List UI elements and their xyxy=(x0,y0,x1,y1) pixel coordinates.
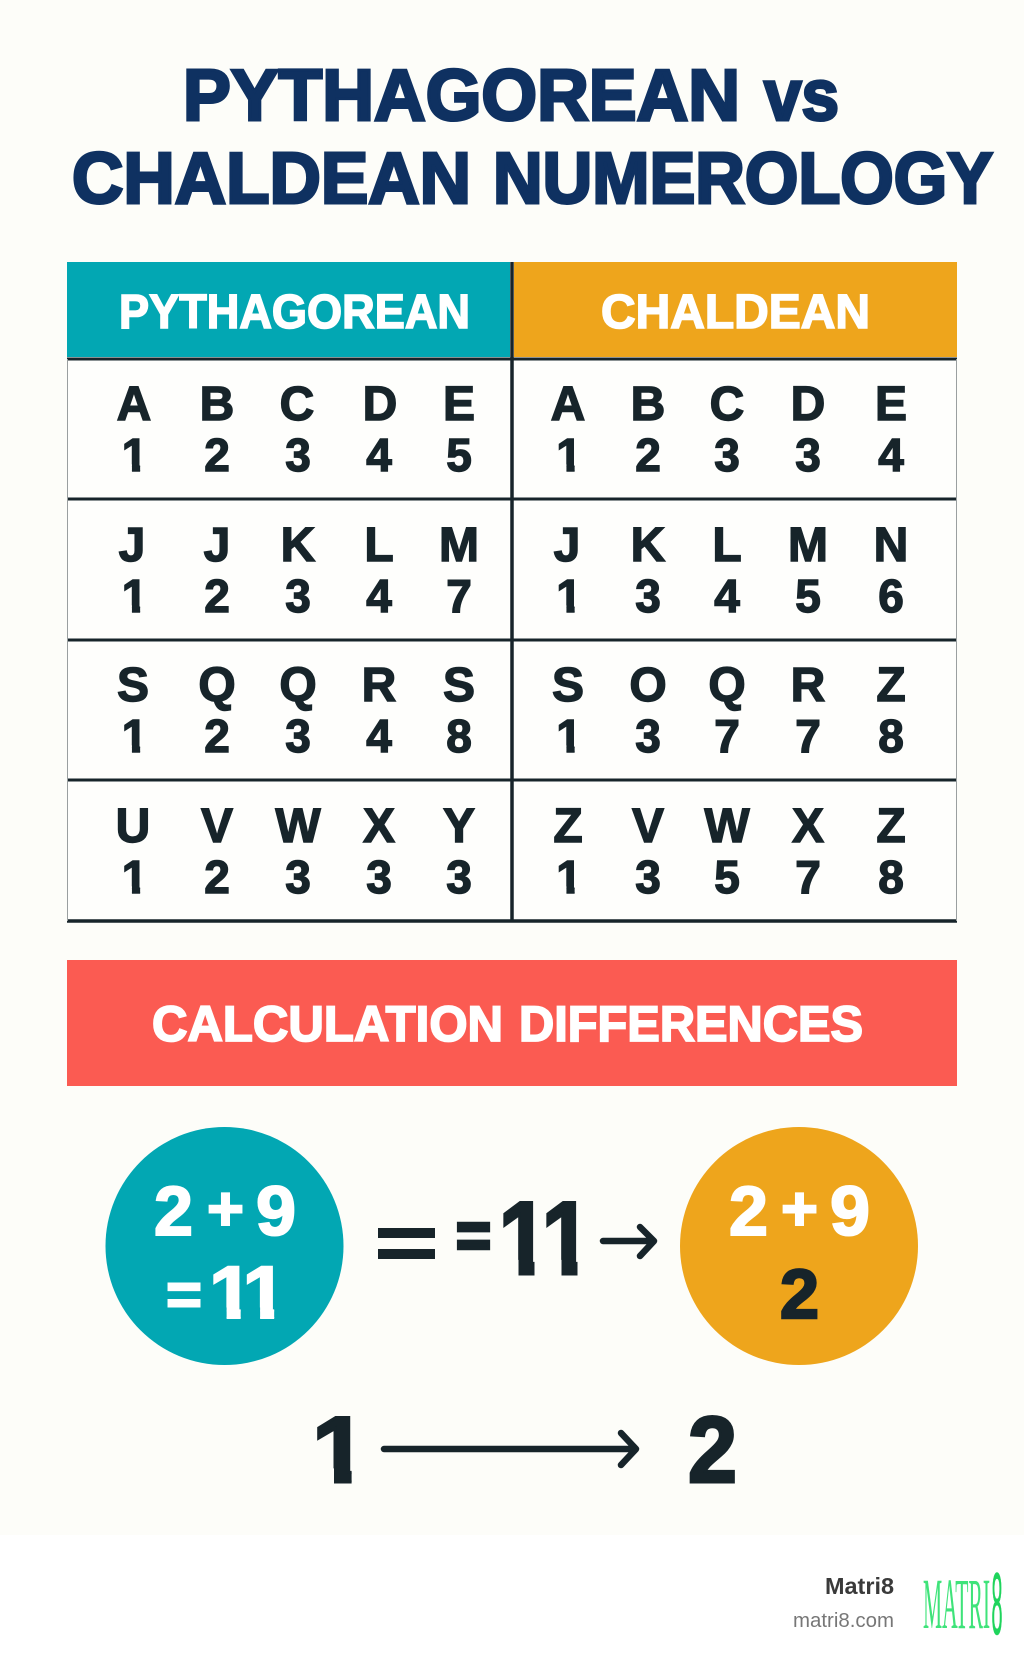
Chaldean row 4: 3578 xyxy=(635,851,904,903)
banner: calculation differences: CALCULATION xyxy=(152,996,503,1052)
orange circle: 2+9 reduces to 2: 9 xyxy=(830,1172,870,1250)
equals signs and 11: = xyxy=(456,1198,491,1272)
banner: calculation differences xyxy=(67,960,957,1086)
arrow: 1 to 2 xyxy=(384,1433,636,1465)
Pythagorean row 4: UVWXY xyxy=(116,800,475,853)
teal circle: 2+9=11: + xyxy=(207,1175,244,1244)
title: vs xyxy=(764,56,839,136)
Chaldean row 4: 1 xyxy=(556,851,582,903)
teal circle: 2+9=11 xyxy=(106,1127,344,1365)
footer brand text xyxy=(793,1573,894,1632)
Pythagorean row 2: 1 xyxy=(122,570,147,622)
Chaldean row 4: ZVWXZ xyxy=(553,800,906,853)
Chaldean row 1 xyxy=(550,386,906,472)
Pythagorean row 4 xyxy=(118,808,476,894)
Pythagorean row 3: SQQRS xyxy=(117,659,475,712)
title: CHALDEAN xyxy=(72,139,471,219)
Chaldean row 2 xyxy=(554,527,906,614)
result: 1 to 2 xyxy=(317,1415,735,1484)
comparison table xyxy=(67,262,957,921)
header: Pythagorean xyxy=(67,262,510,357)
header: Chaldean xyxy=(514,262,957,357)
Pythagorean row 2: JJKLM xyxy=(119,519,479,572)
Pythagorean row 1: 2345 xyxy=(204,429,472,481)
equals signs and 11 xyxy=(378,1201,578,1276)
orange circle: 2+9 reduces to 2 xyxy=(680,1127,918,1365)
Pythagorean row 4: 2333 xyxy=(204,851,472,903)
arrow: to orange circle xyxy=(603,1227,654,1256)
orange circle: 2+9 reduces to 2: 2 xyxy=(729,1172,768,1250)
title xyxy=(72,56,993,219)
result: 1 to 2: 1 xyxy=(312,1397,367,1502)
equals signs and 11: 1 xyxy=(542,1181,592,1297)
teal circle: 2+9=11: 2 xyxy=(154,1172,193,1250)
Pythagorean row 3: 2348 xyxy=(204,710,472,762)
Pythagorean row 3: 1 xyxy=(122,710,147,762)
Chaldean row 2: 1 xyxy=(556,570,582,622)
Pythagorean row 1 xyxy=(116,386,474,472)
Pythagorean row 2: 2347 xyxy=(204,570,472,622)
footer logo xyxy=(923,1557,1003,1662)
title: NUMEROLOGY xyxy=(493,139,993,219)
teal circle: 2+9=11: 1 xyxy=(242,1251,286,1334)
footer brand text: matri8.com xyxy=(793,1610,894,1632)
banner: calculation differences: DIFFERENCES xyxy=(519,996,863,1052)
teal circle: 2+9=11: 9 xyxy=(256,1172,296,1250)
teal circle: 2+9=11: 1 xyxy=(209,1251,253,1334)
Chaldean row 3: 3778 xyxy=(635,710,904,762)
Pythagorean row 1: 1 xyxy=(122,429,147,481)
equals signs and 11: 1 xyxy=(498,1181,548,1297)
Pythagorean row 4: 1 xyxy=(122,851,147,903)
Chaldean row 2: JKLMN xyxy=(554,519,908,572)
title: PYTHAGOREAN xyxy=(183,56,740,136)
table body background xyxy=(67,359,957,921)
Pythagorean row 1: ABCDE xyxy=(117,378,475,431)
Chaldean row 1: 1 xyxy=(556,429,582,481)
Chaldean row 3 xyxy=(552,666,905,754)
teal circle: 2+9=11: = xyxy=(166,1261,202,1328)
orange circle: 2+9 reduces to 2: 2 xyxy=(780,1255,819,1333)
header: Pythagorean: PYTHAGOREAN xyxy=(119,286,470,339)
Chaldean row 2: 3456 xyxy=(635,570,904,622)
Chaldean row 1: ABCDE xyxy=(551,378,907,431)
result: 1 to 2: 2 xyxy=(688,1397,737,1502)
header: Chaldean: CHALDEAN xyxy=(601,286,870,339)
orange circle: 2+9 reduces to 2: + xyxy=(781,1175,818,1244)
Chaldean row 3: SOQRZ xyxy=(552,659,906,712)
Pythagorean row 2 xyxy=(118,527,476,614)
Chaldean row 3: 1 xyxy=(556,710,582,762)
Chaldean row 4 xyxy=(554,808,905,894)
Pythagorean row 3 xyxy=(118,666,474,754)
Chaldean row 1: 2334 xyxy=(635,429,904,481)
footer brand text: Matri8 xyxy=(825,1573,894,1599)
